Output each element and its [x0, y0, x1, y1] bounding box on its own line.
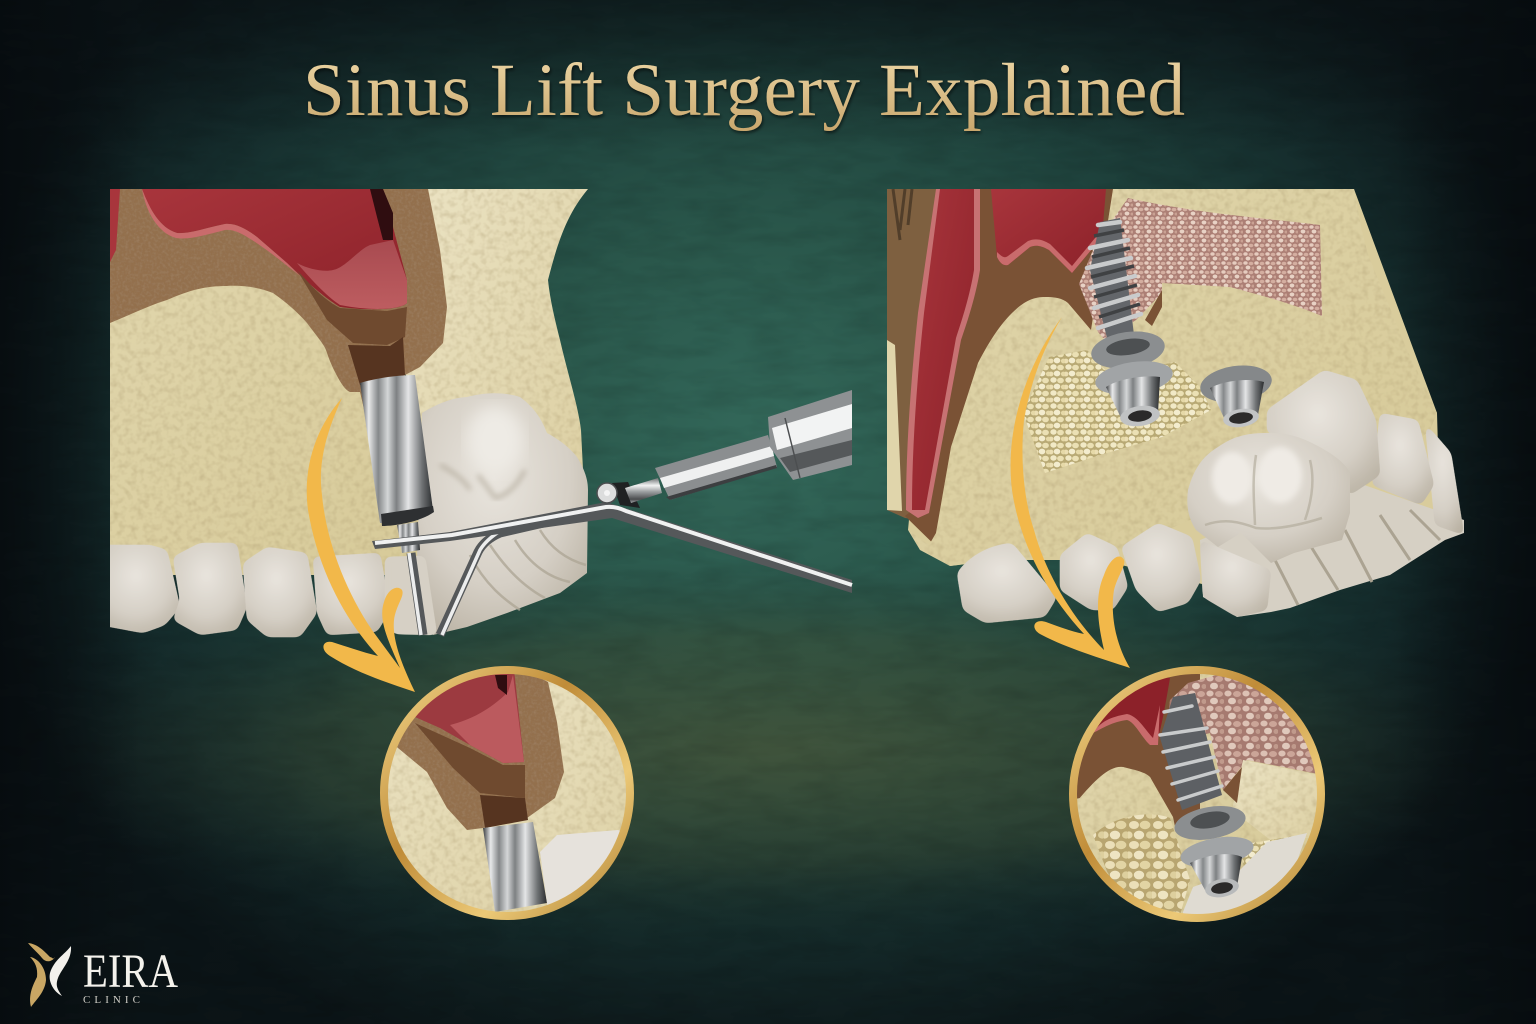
- instrument: neck: [397, 522, 420, 553]
- instrument: osteotome cylinder: [360, 375, 433, 523]
- bone: upper right maxilla: [405, 189, 588, 500]
- title: Sinus Lift Surgery Explained: [303, 49, 1185, 132]
- lifted tissue: [297, 270, 407, 345]
- teeth: lower row: [957, 523, 1271, 623]
- teeth: lower row: [100, 543, 437, 637]
- instrument: pivot joint: [612, 482, 640, 508]
- arrow: right gold arrow to inset: [1011, 317, 1130, 668]
- tissue: outer left wall: [887, 189, 940, 520]
- membrane rim: [142, 189, 300, 276]
- logo: Eira Clinic: [28, 943, 178, 1007]
- sinus membrane: red: [142, 189, 407, 309]
- osteotomy cavity: [348, 337, 405, 385]
- graft: pink sinus augmentation: [1079, 198, 1322, 340]
- membrane lift pocket: [297, 240, 407, 309]
- tooth: front large molar: [1187, 433, 1350, 563]
- tooth: large molar: [417, 393, 588, 635]
- teeth: palatal folds: [1200, 480, 1464, 617]
- instrument: rods: [409, 508, 600, 635]
- dark slit: [370, 189, 393, 240]
- bone base: [908, 189, 1440, 600]
- brown pocket: [1145, 290, 1162, 326]
- arrow: left gold arrow to inset: [307, 398, 415, 692]
- sinus wall: brown tissue: [110, 189, 447, 420]
- panel: right illustration, implants in grafted sinus: [887, 189, 1464, 623]
- instrument: connector and sleeves: [625, 478, 662, 503]
- tagline: CLINIC: [83, 994, 140, 1006]
- molar cusps: [1205, 447, 1322, 528]
- implant: second abutment: [1198, 361, 1274, 429]
- sinus membrane: red strip: [906, 189, 980, 518]
- fold grooves: [1275, 510, 1440, 605]
- panel: left illustration, sinus lift with osteotome: [100, 189, 852, 637]
- implant: threaded screw with abutment: [1087, 218, 1175, 429]
- bone: right maxilla: [908, 189, 1437, 566]
- teeth: back molars: [1267, 370, 1464, 535]
- sinus edge: left red sliver: [110, 189, 120, 262]
- sinus cavity: red: [991, 189, 1106, 273]
- instrument: main arm: [372, 502, 852, 593]
- bone sliver: lower left edge: [887, 340, 902, 511]
- graft: granular bone: [1023, 350, 1211, 473]
- wordmark: EIRA: [83, 945, 178, 998]
- sinus wall: brown tissue: [905, 189, 1130, 560]
- inset: right magnified circle: [1068, 665, 1330, 925]
- bone: main alveolar ridge: [110, 286, 470, 575]
- inset: left magnified circle: [380, 660, 640, 925]
- icon: figure mark: [28, 943, 71, 1007]
